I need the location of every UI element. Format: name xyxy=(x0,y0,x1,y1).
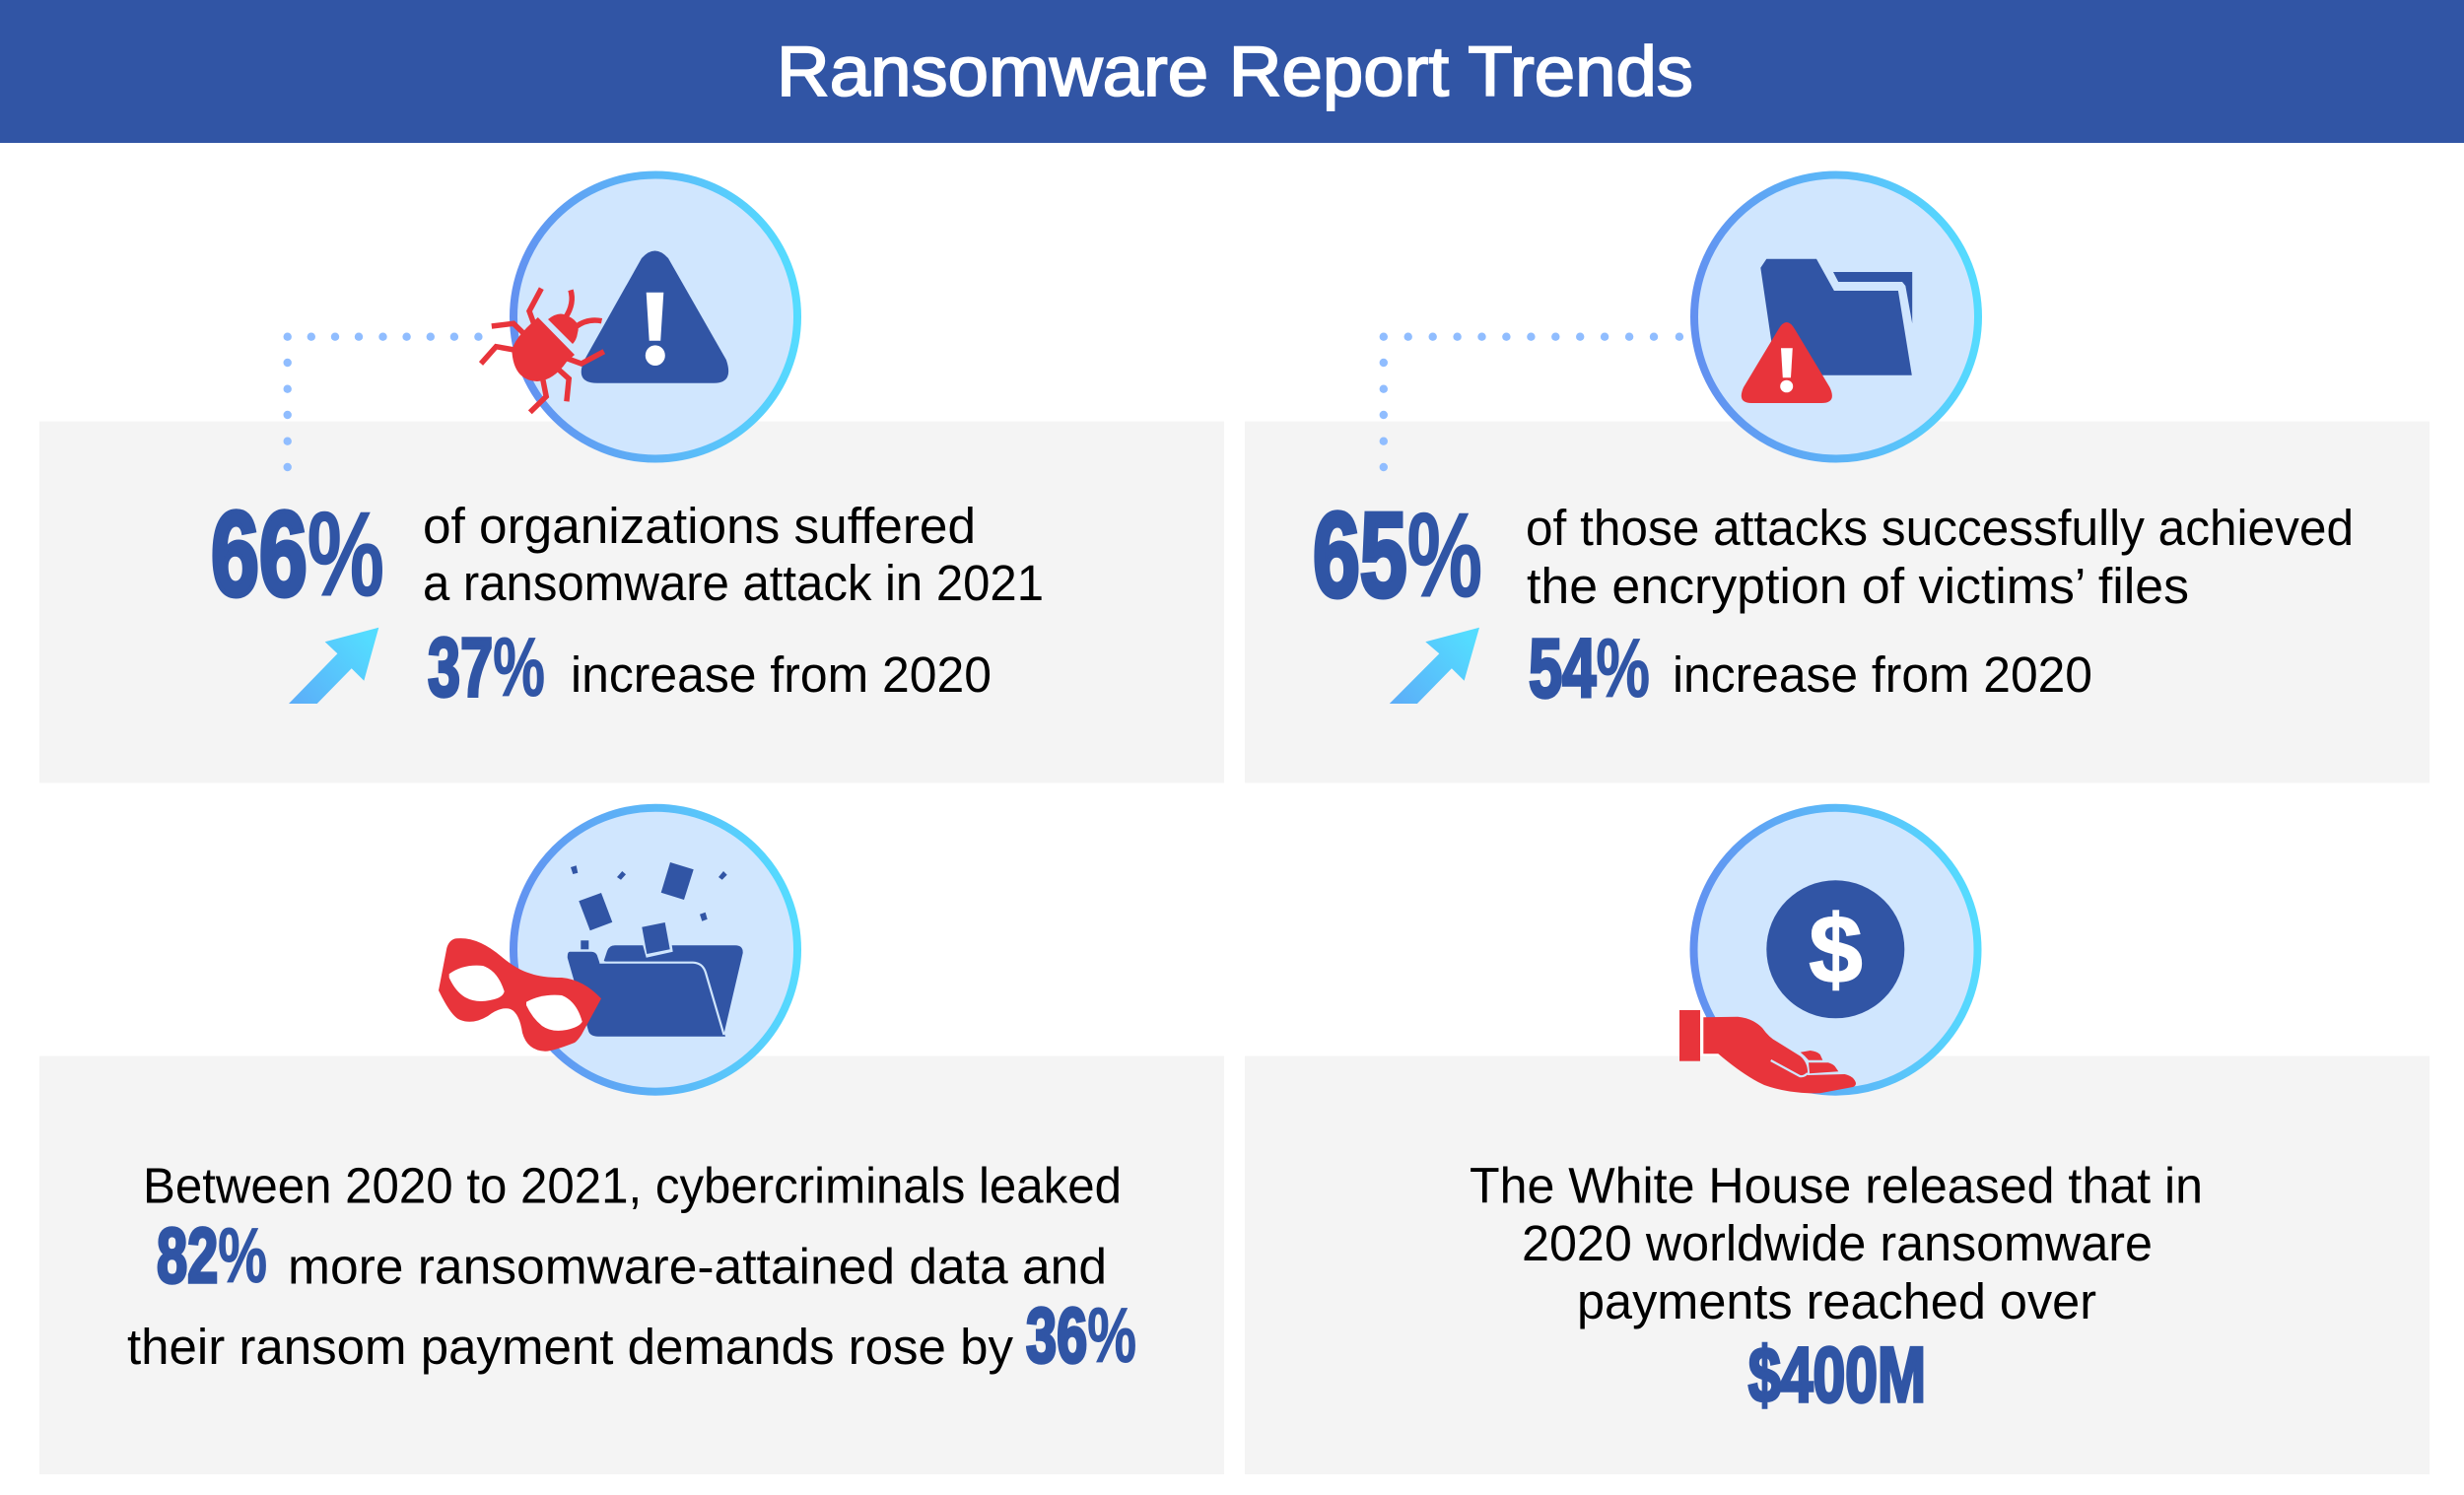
text: a ransomware attack in 2021: a ransomware attack in 2021 xyxy=(423,555,1044,611)
text: more ransomware-attained data and: more ransomware-attained data and xyxy=(288,1239,1107,1295)
dotted connector xyxy=(284,333,483,471)
stat: 65%: 65% xyxy=(1313,488,1482,622)
title: Ransomware Report Trends xyxy=(777,34,1693,111)
icon: open folder with flying documents xyxy=(568,862,743,1037)
icon circle xyxy=(1693,808,1977,1092)
panel: leaked data xyxy=(39,808,1224,1474)
panel background xyxy=(39,1056,1224,1474)
icon: dollar coin: $ xyxy=(1809,895,1863,1003)
stat: 54%: 54% xyxy=(1529,622,1650,714)
icon: red bug xyxy=(481,289,604,412)
icon: red mask xyxy=(439,938,601,1052)
header banner xyxy=(0,0,2464,143)
text: 2020 worldwide ransomware: 2020 worldwide ransomware xyxy=(1522,1215,2153,1271)
icon: red warning triangle xyxy=(1742,322,1832,403)
panel background xyxy=(1245,1056,2430,1474)
icon: warning triangle xyxy=(582,250,728,383)
icon circle xyxy=(1694,175,1978,459)
text: of those attacks successfully achieved: of those attacks successfully achieved xyxy=(1526,500,2354,556)
icon circle xyxy=(513,808,797,1092)
panel: White House $400M xyxy=(1245,808,2430,1474)
stat: $400M: $400M xyxy=(1748,1330,1926,1418)
icon circle xyxy=(513,175,797,459)
panel: 65% encryption of files xyxy=(1245,175,2430,782)
text: increase from 2020: increase from 2020 xyxy=(1673,646,2092,703)
panel: 66% of organizations attacked xyxy=(39,175,1224,782)
dotted connector xyxy=(1380,333,1683,471)
text: increase from 2020: increase from 2020 xyxy=(571,646,992,703)
panel background xyxy=(39,422,1224,782)
arrow: increase xyxy=(1390,628,1479,704)
text: Between 2020 to 2021, cybercriminals leaked: Between 2020 to 2021, cybercriminals leaked xyxy=(143,1158,1122,1214)
text: payments reached over: payments reached over xyxy=(1577,1273,2096,1329)
icon: dollar coin xyxy=(1766,880,1904,1018)
text: The White House released that in: The White House released that in xyxy=(1470,1158,2203,1214)
stat: 66%: 66% xyxy=(211,487,384,621)
arrow: increase xyxy=(289,628,378,704)
text: the encryption of victims' files: the encryption of victims’ files xyxy=(1527,558,2189,614)
stat: 82%: 82% xyxy=(157,1211,267,1299)
stat: 37%: 37% xyxy=(428,621,545,714)
stat: 36%: 36% xyxy=(1026,1291,1136,1379)
panel background xyxy=(1245,422,2430,782)
icon: red hand xyxy=(1679,1010,1856,1093)
icon: folder xyxy=(1760,259,1912,375)
text: their ransom payment demands rose by: their ransom payment demands rose by xyxy=(127,1319,1013,1375)
text: of organizations suffered: of organizations suffered xyxy=(423,498,976,554)
